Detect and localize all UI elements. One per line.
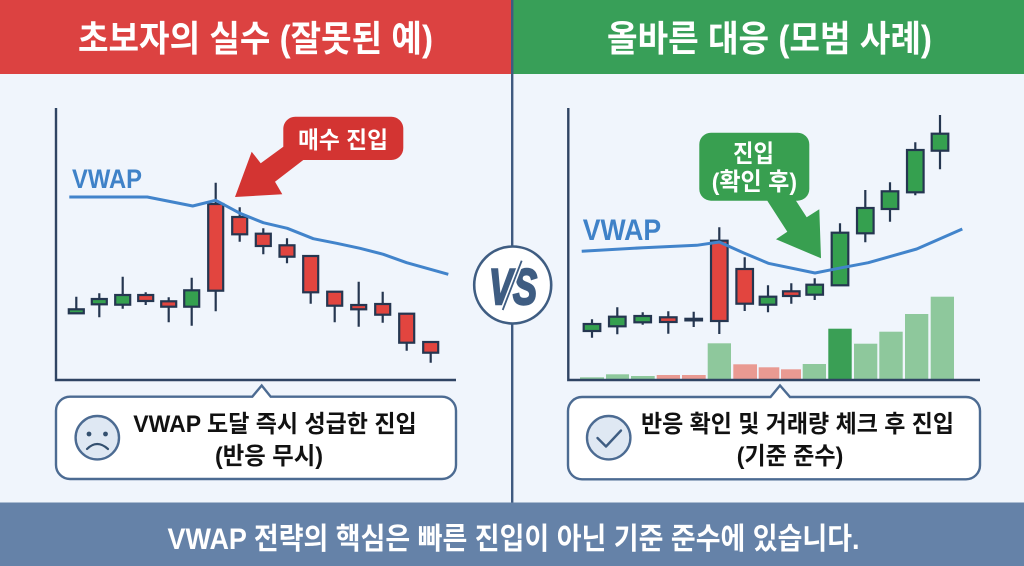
right VWAP line	[582, 229, 962, 273]
right VWAP label: VWAP	[583, 214, 661, 247]
callout: entry after confirmation with arrow: (확인 후)	[712, 168, 797, 196]
left VWAP label: VWAP	[72, 164, 142, 194]
panel: left chart	[56, 108, 456, 380]
left candlesticks	[69, 183, 438, 363]
right takeaway box: (기준 준수)	[737, 443, 843, 470]
callout: entry after confirmation with arrow	[699, 133, 821, 258]
right header: correct response: 올바른 대응 (모범 사례)	[607, 18, 932, 59]
VS badge: VS	[489, 259, 537, 315]
volume bars	[580, 297, 954, 380]
right header: correct response	[512, 0, 1024, 74]
callout: buy entry with arrow	[235, 117, 403, 197]
icon: sad face	[76, 416, 119, 459]
left VWAP line	[69, 197, 448, 274]
left takeaway box	[56, 386, 456, 479]
callout: entry after confirmation with arrow: 진입	[733, 140, 774, 168]
right takeaway box	[568, 386, 980, 479]
footer banner: VWAP 전략의 핵심은 빠른 진입이 아닌 기준 준수에 있습니다.	[168, 523, 860, 556]
right takeaway box: 반응 확인 및 거래량 체크 후 진입	[641, 411, 954, 438]
icon: check mark	[587, 416, 630, 459]
left takeaway box: (반응 무시)	[215, 443, 323, 470]
footer banner	[0, 502, 1024, 566]
right candlesticks	[584, 115, 948, 338]
left takeaway box: VWAP 도달 즉시 성급한 진입	[133, 411, 417, 438]
left header: beginner mistake	[0, 0, 512, 74]
left header: beginner mistake: 초보자의 실수 (잘못된 예)	[78, 18, 433, 59]
callout: buy entry with arrow: 매수 진입	[298, 127, 388, 153]
panel: right chart	[568, 108, 980, 380]
VS badge	[474, 246, 551, 324]
